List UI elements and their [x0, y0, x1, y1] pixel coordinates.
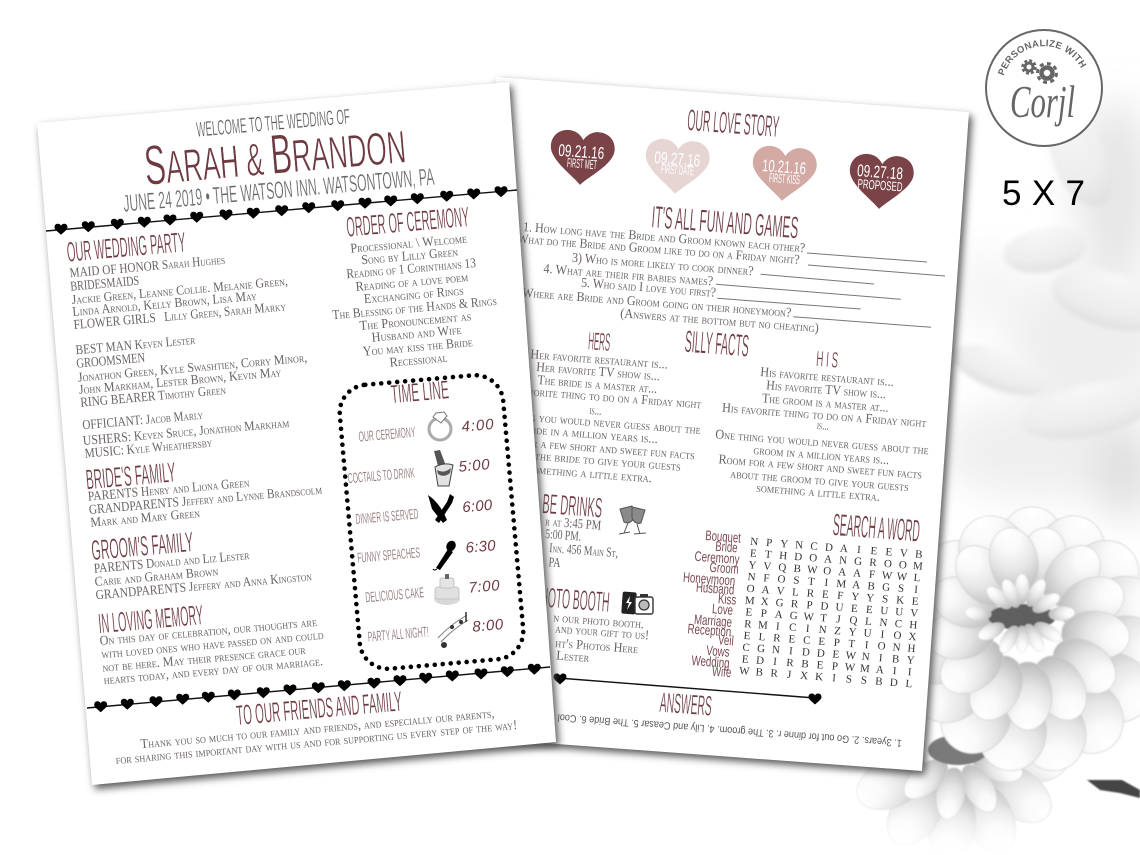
word list: Ceremony [694, 548, 740, 567]
text block: in loving memory [99, 614, 325, 687]
quiz questions: 5. Who said I love you first? [581, 275, 717, 300]
text block: drinks details [545, 514, 619, 570]
text block: her facts: something a little extra. [528, 461, 653, 485]
text block: her facts: bride in a million years is... [522, 421, 659, 446]
text block: in loving memory: not be here. May their presence grace our [102, 642, 306, 675]
text block: photo booth details: ht's Photos Here [555, 635, 639, 656]
timeline row: ceremony: 4:00 [461, 416, 495, 436]
icon: phone and camera [621, 592, 653, 614]
text block: his facts: His favorite restaurant is... [760, 364, 895, 389]
word list: Bride [715, 538, 738, 555]
text block: order of ceremony: Processional \ Welcome [350, 231, 468, 256]
panel: right card, love story and games: BE DRINKS [541, 488, 603, 523]
word list: Kiss [717, 590, 737, 608]
text block: order of ceremony: Song by Lilly Green [361, 244, 459, 267]
word list: Marriage [693, 611, 733, 630]
heart: first date: FIRST DATE [660, 161, 695, 178]
heart: first met [548, 129, 616, 187]
text block: bride's family [87, 475, 323, 530]
word search grid: NPYNCDAIEEVB [750, 536, 923, 561]
quiz questions: 4. What are their fir babies names? [543, 261, 714, 288]
word search grid [739, 536, 924, 690]
text block: order of ceremony: The Blessing of the Hands & Rings [332, 293, 497, 322]
word search grid: NFOSTIMABGSI [747, 571, 919, 596]
text block: order of ceremony: Reading of a love poem [355, 269, 469, 294]
heart: first kiss: FIRST KISS [768, 170, 801, 187]
panel: right card, love story and games: SEARCH A WORD [832, 507, 921, 549]
text block: in loving memory: with loved ones who have passed on and could [101, 627, 325, 661]
panel: left card, wedding program: OUR WEDDING PARTY [66, 226, 187, 268]
text block: her facts: Room for a few short and sweet fun facts [491, 432, 695, 462]
panel: left card, wedding program: BRIDE'S FAMILY [85, 457, 177, 495]
text block: in loving memory: hearts today, and every day of our marriage. [103, 653, 323, 687]
title block [122, 105, 435, 218]
text block: bride's family: PARENTS Henry and Liona Green [87, 475, 250, 504]
text block: wedding party [69, 252, 308, 461]
text block: groom's family: GRANDPARENTS Jeffery and Anna Kingston [95, 568, 313, 602]
text block: photo booth details: and your gift to us! [555, 621, 650, 643]
text block: wedding party: John Markham, Lester Brown, Kevin May [78, 364, 282, 397]
text block: his facts: something a little extra. [756, 480, 881, 504]
text block: groom's family: PARENTS Donald and Liz Lester [93, 547, 250, 576]
timeline row: cake: DELICIOUS CAKE [365, 585, 425, 606]
timeline row: ceremony: OUR CEREMONY [358, 425, 416, 446]
text block: wedding party: BRIDESMAIDS [70, 273, 140, 294]
quiz questions: What do the Bride and Groom like to do on a Friday night? [517, 231, 800, 267]
text block: drinks details: Inn. 456 Main St, [549, 540, 619, 560]
timeline row: ceremony [358, 412, 495, 446]
text block: her facts: Her favorite restaurant is... [530, 346, 669, 372]
text block: her facts: Her favorite thing to do on a Friday night [496, 381, 702, 411]
text block: her facts: is... [589, 402, 602, 418]
word search grid: WBRJXKISSBDL [739, 665, 913, 690]
text block: order of ceremony: Reading of 1 Corinthians 13 [346, 255, 477, 281]
timeline row: dinner: 6:00 [462, 497, 494, 516]
word search grid: RMICINZYUIOX [744, 618, 917, 643]
word list: Veil [717, 631, 734, 648]
timeline row: party: PARTY ALL NIGHT! [367, 624, 429, 646]
word list: Wife [711, 663, 732, 680]
panel: right card, love story and games: SILLY FACTS [684, 324, 750, 363]
text block: his facts: One thing you would never guess about the [715, 426, 930, 457]
text block: her facts: about the bride to give your guests [502, 445, 681, 474]
panel: right card, love story and games: HERS [587, 327, 611, 357]
size label: 5 X 7: 5 X 7 [1002, 174, 1085, 213]
text block: drinks details: 5:00 PM. [545, 526, 582, 544]
text block: his facts: His favorite thing to do on a Friday night [721, 400, 927, 430]
quiz questions: 3) Who is more likely to cook dinner? [571, 250, 754, 278]
word search grid: YVQBWOAAFWWL [748, 559, 921, 584]
heart: first date: 09.27.16 [654, 148, 701, 170]
upside-down answers text: 1. 3years. 2. Go out for dinne r. 3. The groom. 4. Lily and Ceasar 5. The Bride 6. Cool [557, 711, 902, 749]
word search grid: ELRECEPTIONH [743, 630, 916, 655]
text block: his facts: Room for a few short and sweet fun facts [718, 451, 923, 482]
panel: right card, love story and games: PHOTO BOOTH [533, 581, 611, 618]
text block: his facts: about the groom to give your guests [730, 466, 909, 494]
word list: Vows [706, 642, 730, 660]
heart: first date [643, 138, 711, 196]
text block: wedding party: OFFICIANT: Jacob Marly [82, 407, 204, 432]
text block: groom's family: Carie and Graham Brown [94, 563, 219, 589]
divider: top heart line [46, 186, 517, 235]
word list [682, 527, 742, 680]
icon: champagne glasses [619, 506, 646, 534]
text block: his facts: groom in a million years is... [753, 442, 890, 467]
text block: wedding party: FLOWER GIRLS Lilly Green, Sarah Marky [73, 298, 287, 332]
quiz questions [517, 219, 945, 335]
text block: wedding party: Jonathon Green, Kyle Swashtien, Corry Minor, [77, 350, 308, 385]
word list: Husband [695, 579, 735, 598]
text block: wedding party: GROOMSMEN [76, 350, 146, 371]
word search grid: OAVLREFYYSKE [746, 583, 919, 608]
panel: left card, wedding program: TO OUR FRIENDS AND FAMILY [235, 686, 403, 731]
text block: order of ceremony: The Pronouncement as [359, 308, 472, 333]
text block: wedding party: USHERS: Keven Sruce, Jonathon Markham [82, 415, 290, 448]
word list: Reception [687, 620, 732, 640]
heart: first kiss [750, 145, 818, 203]
timeline row: dinner: DINNER IS SERVED [355, 507, 419, 528]
flower: small lower flower [848, 731, 1070, 855]
panel: time line: TIME LINE [390, 374, 450, 409]
text block: order of ceremony: You may kiss the Bride [362, 334, 474, 359]
text block: wedding party: Jackie Green, Leanne Collie. Melanie Green, [71, 273, 288, 307]
title block: JUNE 24 2019 • THE WATSON INN. WATSONTOWN, PA [122, 164, 435, 218]
timeline row: speeches: FUNNY SPEACHES [357, 545, 421, 567]
text block: order of ceremony [332, 231, 497, 370]
word search grid: EDIRBEPWMAII [741, 653, 912, 678]
text block: wedding party: MAID OF HONOR Sarah Hughes [69, 252, 226, 280]
heart: proposed: PROPOSED [857, 176, 903, 194]
text block: wedding party: RING BEARER Timothy Green [80, 382, 227, 410]
quiz questions: Where are Bride and Groom going on their honeymoon? [521, 285, 792, 320]
panel: right card, love story and games [449, 77, 972, 775]
panel: left card, wedding program: IN LOVING MEMORY [97, 599, 205, 639]
text block: order of ceremony: Husband and Wife [371, 322, 462, 345]
panel: right card, love story and games: ANSWERS [659, 687, 713, 722]
word search grid: EPAGWTJQLNCH [745, 606, 918, 632]
timeline row: party: 8:00 [472, 616, 505, 636]
timeline row: cocktails: COCTAILS TO DRINK [347, 465, 416, 487]
panel: left card, wedding program: ORDER OF CEREMONY [345, 201, 470, 243]
text block: his facts: is... [816, 417, 830, 433]
word list: Groom [709, 559, 739, 577]
text block: photo booth details: n our photo booth. [553, 610, 645, 631]
badge: personalize with Corjl: PERSONALIZE WITH [998, 40, 1086, 76]
quiz questions: (Answers at the bottom but no cheating) [620, 305, 819, 335]
timeline row: speeches: 6:30 [465, 537, 497, 557]
heart: proposed: 09.27.18 [856, 161, 904, 183]
text block: order of ceremony: Exchanging of Rings [363, 283, 464, 306]
panel: right card, love story and games: OUR LOVE STORY [686, 104, 780, 144]
panel: right card, love story and games: H I S [815, 346, 839, 373]
text block: bride's family: Mark and Mary Green [90, 505, 201, 530]
text block: his facts [715, 364, 930, 504]
divider: heart line above answers [554, 674, 822, 704]
text block: his facts: His favorite TV show is... [766, 377, 887, 401]
heart: first met: 09.21.16 [558, 141, 605, 163]
timeline row: cocktails: 5:00 [458, 456, 491, 476]
word list: Honeymoon [682, 569, 736, 589]
text block: drinks details: r at 3:45 PM [545, 514, 602, 533]
text block: wedding party: Linda Arnold, Kelly Brown, Lisa May [72, 288, 258, 319]
text block: his facts: The groom is a master at... [761, 390, 889, 415]
flower: large main flower [895, 505, 1140, 777]
badge: personalize with Corjl: Corjl [1010, 76, 1075, 127]
word search grid: ETHDOANGROOM [750, 548, 923, 573]
divider: bottom heart line [87, 664, 550, 712]
heart: first kiss: 10.21.16 [761, 156, 807, 178]
text block: her facts: One thing you would never guess about the [487, 406, 702, 437]
heart: first met: FIRST MET [566, 155, 598, 172]
title block: WELCOME TO THE WEDDING OF [195, 105, 351, 142]
text block: in loving memory: On this day of celebration, our thoughts are [99, 614, 318, 648]
quiz questions: 1. How long have the Bride and Groom known each other? [522, 219, 806, 255]
text block: her facts: Her favorite TV show is... [536, 359, 661, 383]
timeline row: cake: 7:00 [468, 577, 501, 597]
panel: time line [337, 373, 526, 671]
text block: order of ceremony: Recessional [389, 350, 448, 370]
panel: left card, wedding program: GROOM'S FAMILY [90, 526, 195, 566]
heart: proposed [847, 153, 915, 211]
text block: wedding party: MUSIC: Kyle Wheathersby [84, 435, 213, 461]
badge: personalize with Corjl [985, 29, 1103, 147]
faint upper petals [946, 104, 1140, 450]
text block: wedding party: BEST MAN Keven Lester [75, 332, 196, 357]
text block: thank you message: for sharing this important day with us and for supporting us every step of the way! [115, 717, 518, 767]
text block: photo booth details [553, 610, 650, 665]
panel: left card, wedding program [37, 82, 559, 789]
word list: Wedding [691, 652, 730, 671]
text block: thank you message: Thank you so much to our family and friends, and especially our parents, [140, 705, 495, 751]
word list: Love [711, 600, 734, 618]
text block: bride's family: GRANDPARENTS Jeffery and Lynne Brandscolm [88, 482, 323, 517]
panel: right card, love story and games: IT'S ALL FUN AND GAMES [650, 199, 800, 245]
text block: photo booth details: Lester [556, 648, 590, 665]
title block: SARAH & BRANDON [142, 111, 408, 197]
word search grid: MXGRPDUEEUUV [744, 594, 919, 620]
word list: Bouquet [705, 527, 742, 546]
word search grid: CGNIDDEWNIBY [742, 642, 915, 667]
text block: drinks details: PA [548, 554, 561, 570]
text block: her facts: The bride is a master at... [537, 372, 658, 396]
text block: groom's family [93, 547, 313, 602]
text block: her facts [487, 346, 702, 485]
